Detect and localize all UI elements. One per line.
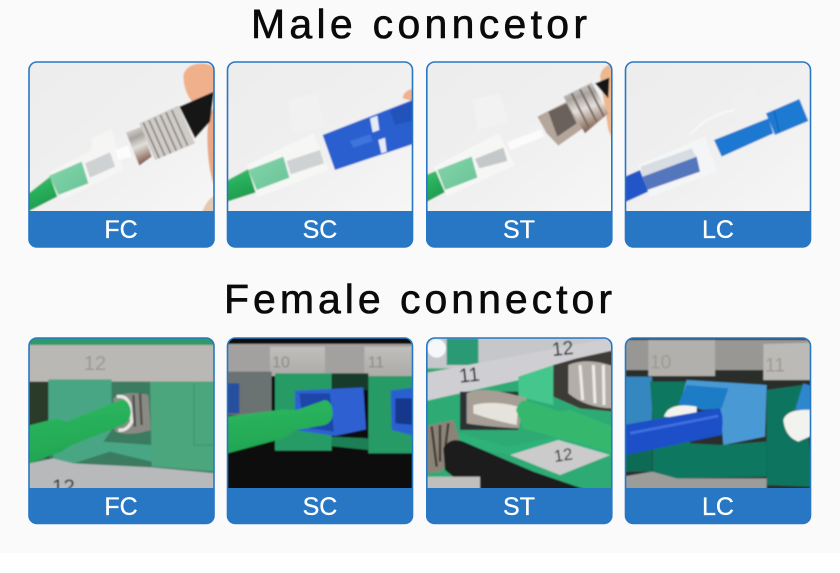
panel: female LC: 10 (650, 352, 671, 373)
label bar: ST (426, 488, 612, 524)
panel: female ST: 11 (458, 364, 481, 388)
label bar: SC (227, 488, 413, 524)
panel: male LC (623, 58, 813, 247)
title: female connector: Female connector (224, 276, 612, 322)
panel: male SC (225, 58, 415, 247)
label bar: SC (227, 211, 413, 247)
label bar: FC (28, 211, 214, 247)
panel: female LC: 11 (765, 356, 785, 377)
label bar: SC: SC (303, 216, 337, 244)
label bar: FC (28, 488, 214, 524)
panel: female ST: 12 (553, 445, 574, 466)
panel: female ST: 12 (551, 338, 575, 361)
panel: male ST (424, 58, 615, 247)
label bar: LC (625, 211, 811, 247)
panel: female FC: 12 (84, 353, 106, 375)
label bar: ST: ST (503, 493, 535, 521)
label bar: FC: FC (104, 493, 138, 521)
panel: female SC (225, 335, 415, 524)
label bar: FC: FC (104, 216, 138, 244)
title: male connector: Male conncetor (251, 1, 587, 47)
panel: female ST (424, 335, 615, 524)
label bar: SC: SC (303, 493, 337, 521)
panel: female FC: 12 (52, 475, 75, 498)
label bar: ST: ST (503, 216, 535, 244)
panel: female SC: 11 (368, 354, 384, 371)
panel: female SC: 10 (272, 354, 290, 371)
label bar: ST (426, 211, 612, 247)
panel: female LC (623, 335, 813, 524)
label bar: LC (625, 488, 811, 524)
label bar: LC: LC (702, 216, 734, 244)
panel: female FC (27, 335, 217, 524)
label bar: LC: LC (702, 493, 734, 521)
panel: male FC (27, 58, 217, 247)
